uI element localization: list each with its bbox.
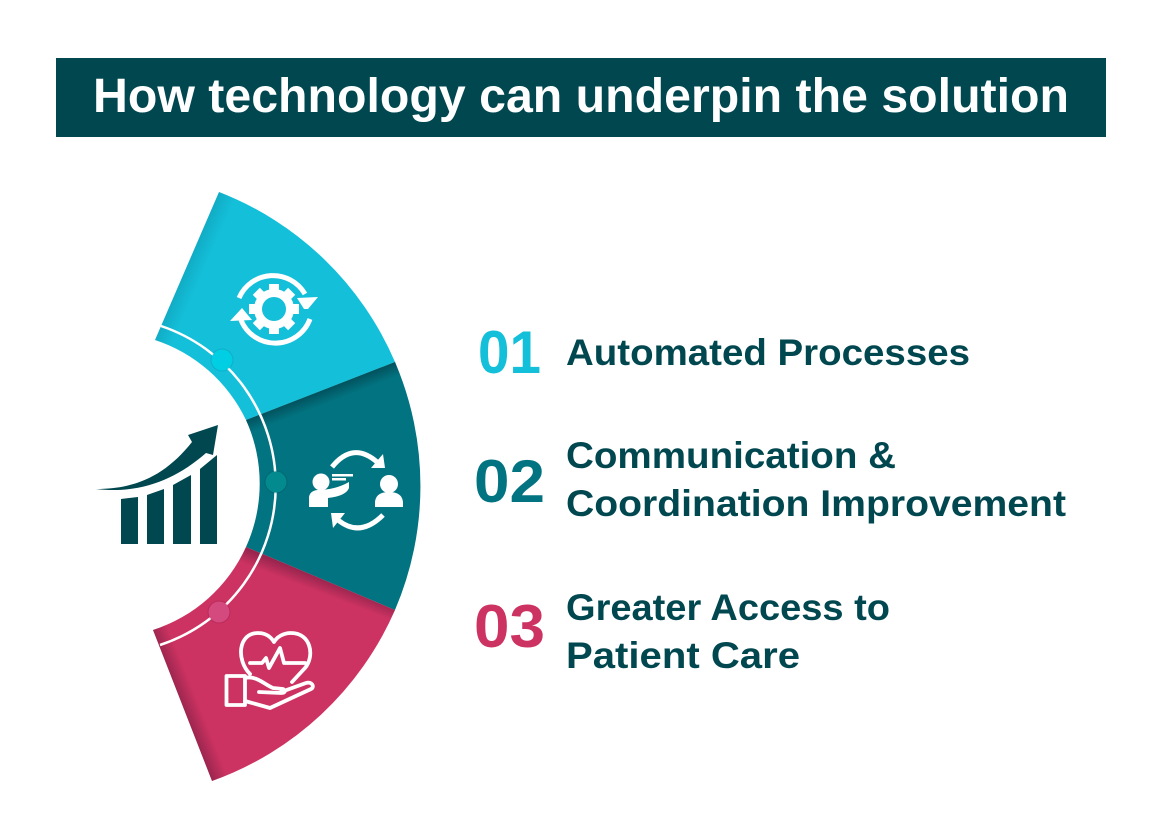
item 3 [474,587,890,676]
node: teal dot [264,470,288,494]
label: Automated Processes: Automated Processes [566,332,970,373]
panel: pink segment [153,547,395,781]
item 1 [478,319,970,386]
fan diagram [153,192,420,781]
number 01: 01 [478,319,541,386]
node: cyan dot [210,348,234,372]
label: Greater Access to Patient Care: Patient Care [566,635,800,676]
icon: two people exchanging information [309,453,403,528]
label: Communication & Coordination Improvement: Communication & [566,435,896,476]
node: pink dot [208,600,230,624]
number 02: 02 [474,448,545,515]
label: Greater Access to Patient Care [566,587,890,676]
panel: teal segment [246,362,420,610]
icon: rising bar chart with arrow [96,425,218,544]
panel: cyan segment [155,192,395,420]
title banner [56,58,1106,137]
label: Greater Access to Patient Care: Greater Access to [566,587,890,628]
label: Communication & Coordination Improvement: Coordination Improvement [566,483,1066,524]
white connector arc [160,326,276,645]
label: Communication & Coordination Improvement [566,435,1066,524]
title: How technology can underpin the solution [93,70,1069,123]
item 2 [474,435,1066,524]
icon: heart with pulse on a hand [226,633,313,708]
number 03: 03 [474,593,545,660]
icon: gear with cycle arrows [230,276,318,343]
